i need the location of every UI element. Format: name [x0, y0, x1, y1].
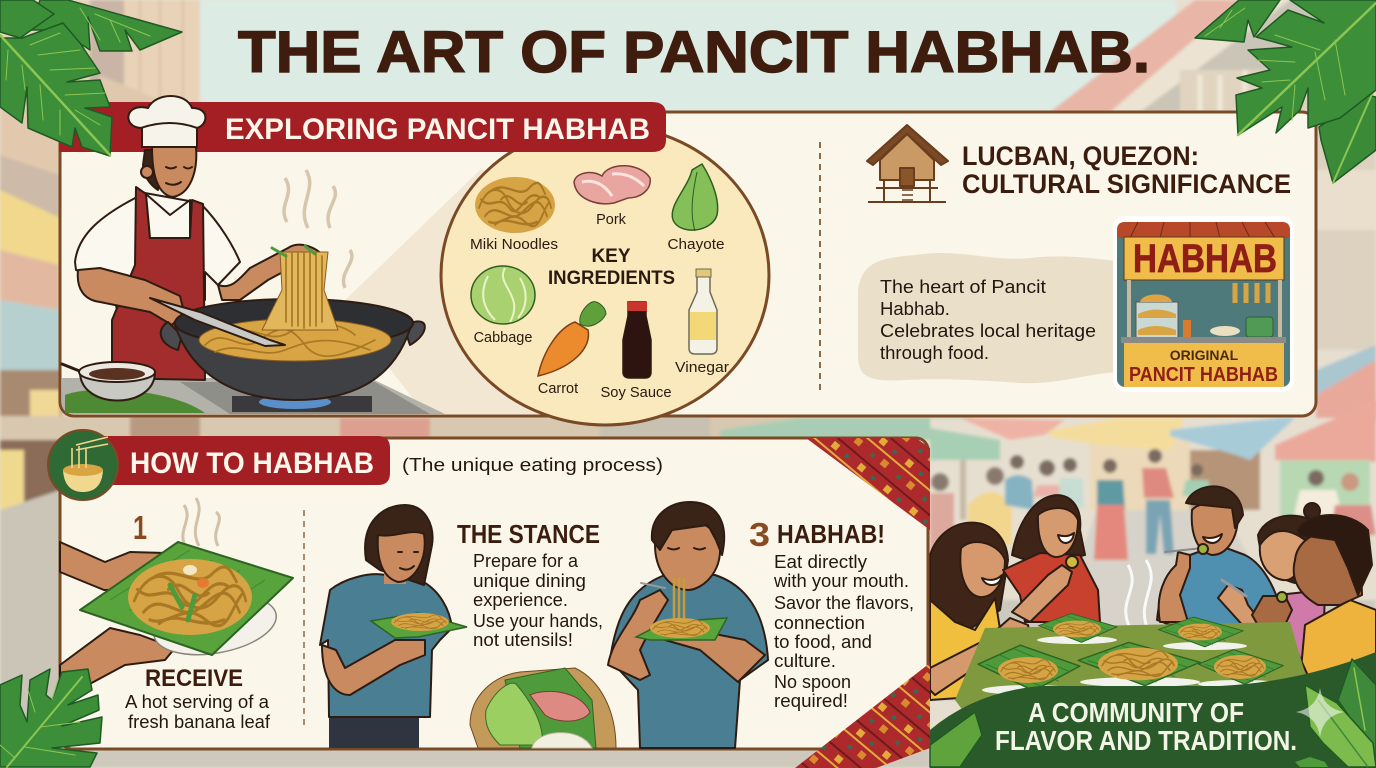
label: key ingredients: KEY	[591, 246, 631, 267]
heading: lucban quezon	[962, 141, 1291, 199]
panel: exploring pancit habhab	[60, 112, 1316, 416]
heading banner: exploring pancit habhab	[59, 102, 666, 152]
label: key ingredients	[548, 246, 675, 289]
person in blue shirt	[1157, 486, 1283, 625]
text block: heart of pancit habhab: Celebrates local heritage	[880, 320, 1096, 341]
ingredient: miki noodles	[470, 177, 558, 253]
heading banner: how to habhab: (The unique eating process)	[402, 455, 663, 475]
heading: lucban quezon: CULTURAL SIGNIFICANCE	[962, 169, 1291, 199]
step description: habhab: connection	[774, 612, 865, 633]
person in red shirt	[1003, 495, 1100, 622]
man eating from leaf plate	[608, 502, 768, 748]
step description: habhab: Savor the flavors,	[774, 592, 914, 613]
person in yellow shirt	[930, 523, 1030, 700]
person in orange shirt	[1252, 515, 1376, 680]
chef	[75, 96, 325, 380]
step 1: receive	[60, 498, 293, 732]
step title: receive: RECEIVE	[145, 665, 243, 692]
text block: heart of pancit habhab: through food.	[880, 342, 989, 363]
section: lucban, quezon cultural significance	[858, 125, 1294, 392]
illustration: habhab food stall	[1113, 216, 1294, 392]
step description: habhab: with your mouth.	[773, 570, 909, 591]
label: key ingredients: INGREDIENTS	[548, 268, 675, 289]
ingredient: cabbage	[471, 266, 535, 346]
icon: noodle bowl badge	[48, 430, 118, 500]
heading banner: how to habhab	[100, 436, 663, 485]
dashed divider	[303, 510, 305, 726]
step 2: the stance	[320, 505, 616, 748]
decorative woven strip top right	[806, 438, 930, 530]
step description: the stance: unique dining	[473, 570, 586, 591]
ingredient: pork: Pork	[596, 212, 627, 228]
step description: receive: A hot serving of a	[125, 692, 270, 712]
scene: community eating together	[930, 400, 1376, 768]
heading banner: exploring pancit habhab: EXPLORING PANCIT HABHAB	[225, 113, 650, 146]
ingredient: miki noodles: Miki Noodles	[470, 237, 558, 253]
market backdrop with awnings and crowd	[930, 400, 1376, 708]
ingredient: cabbage: Cabbage	[474, 330, 532, 346]
leaf plate	[371, 613, 467, 638]
step description: the stance: not utensils!	[473, 629, 573, 650]
step description: habhab: culture.	[774, 650, 836, 671]
sparkle mark	[1296, 688, 1344, 737]
stove top	[62, 378, 445, 414]
banana leaf with noodles	[80, 542, 293, 655]
ingredient: soy sauce: Soy Sauce	[600, 385, 672, 401]
illustration: habhab food stall: PANCIT HABHAB	[1129, 364, 1278, 386]
sauce bowl	[62, 362, 155, 400]
panel: how to habhab	[60, 438, 928, 749]
ingredient: carrot: Carrot	[538, 381, 578, 397]
dashed divider	[819, 142, 821, 392]
step number 3: 3	[749, 516, 770, 553]
step title: the stance: THE STANCE	[457, 519, 600, 549]
step description: habhab	[773, 551, 914, 711]
decorative leaves: top left	[0, 0, 182, 156]
ingredient: chayote: Chayote	[668, 237, 724, 253]
heading banner: how to habhab: HOW TO HABHAB	[130, 447, 374, 480]
ingredient: vinegar	[675, 269, 729, 376]
step description: the stance: Prepare for a	[473, 550, 579, 571]
ingredient: pork	[574, 166, 650, 228]
decorative leaf: bottom left	[0, 669, 102, 767]
banner: community of flavor: FLAVOR AND TRADITION.	[995, 725, 1297, 756]
person in pink shirt	[1218, 503, 1325, 662]
step description: receive: fresh banana leaf	[128, 712, 271, 732]
plate	[149, 587, 281, 663]
hands	[60, 542, 175, 700]
illustration: habhab food stall: ORIGINAL	[1170, 347, 1239, 363]
ingredient: chayote	[668, 164, 724, 253]
noodles into mouth and leaf plate	[636, 578, 727, 640]
step description: habhab: Eat directly	[774, 551, 868, 572]
step title: habhab: HABHAB!	[777, 519, 885, 549]
text block: heart of pancit habhab	[858, 253, 1125, 383]
man holding leaf plate	[320, 505, 452, 748]
step description: the stance: Use your hands,	[473, 610, 603, 631]
step description: habhab: No spoon	[774, 671, 851, 692]
decorative woven strip bottom right	[795, 663, 930, 768]
step number 1: 1	[133, 509, 147, 546]
title: THE ART OF PANCIT HABHAB.	[238, 20, 1150, 85]
ingredient: soy sauce	[600, 302, 672, 401]
steam above the wok	[284, 170, 352, 288]
text block: heart of pancit habhab: The heart of Pancit	[880, 276, 1046, 297]
illustration: habhab food stall: HABHAB	[1133, 237, 1277, 281]
ingredient: carrot	[538, 302, 606, 397]
illustration: chef tossing noodles in a wok	[62, 96, 445, 414]
step description: receive	[125, 692, 271, 732]
wok with noodles	[150, 246, 425, 400]
illustration: ingredient basket	[470, 668, 616, 748]
text block: heart of pancit habhab: Habhab.	[880, 298, 950, 319]
step 3: habhab	[608, 502, 914, 748]
decorative leaves: top right	[1195, 0, 1376, 183]
ingredient: vinegar: Vinegar	[675, 360, 729, 376]
panel: key ingredients	[441, 125, 769, 425]
step description: the stance: experience.	[473, 589, 568, 610]
heading: lucban quezon: LUCBAN, QUEZON:	[962, 141, 1199, 171]
icon: bahay kubo house	[867, 125, 948, 202]
step description: habhab: required!	[774, 690, 848, 711]
step description: habhab: to food, and	[774, 631, 872, 652]
steam	[183, 498, 219, 548]
step description: the stance	[473, 550, 603, 650]
decorative leaves: bottom right	[930, 659, 1376, 767]
banner: community of flavor: A COMMUNITY OF	[1028, 697, 1244, 728]
banner: community of flavor	[930, 652, 1376, 768]
table with banana leaf plates	[955, 614, 1310, 720]
steam	[1126, 560, 1151, 630]
